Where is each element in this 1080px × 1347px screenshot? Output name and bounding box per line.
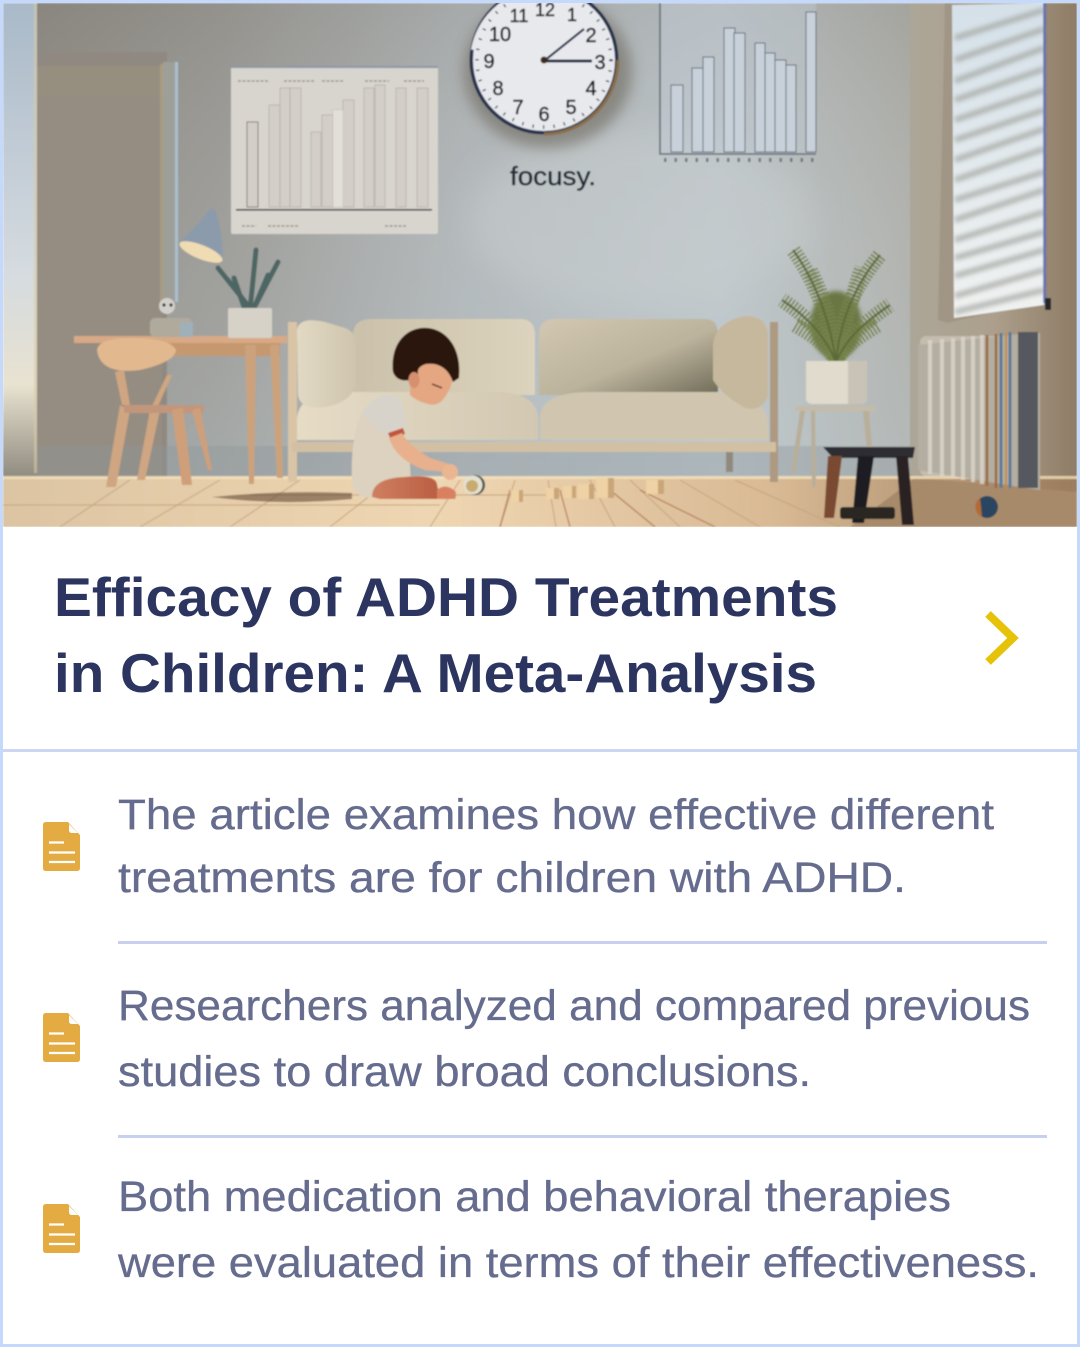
text: first point — [118, 791, 994, 902]
floor — [3, 476, 1077, 527]
wall clock: 10 — [489, 24, 511, 46]
wall clock: 6 — [538, 104, 550, 126]
desk lamp — [178, 208, 224, 264]
skirting — [37, 446, 917, 478]
wall clock — [464, 0, 632, 148]
bullet 1 — [43, 791, 994, 902]
side table — [791, 406, 875, 487]
wall clock: 5 — [565, 97, 577, 119]
window with blinds — [938, 3, 1051, 323]
sofa — [288, 316, 778, 482]
text: first point: The article examines how effective different — [118, 791, 994, 839]
text: second point: studies to draw broad conclusions. — [118, 1048, 811, 1096]
chair — [97, 338, 212, 487]
wall clock: 2 — [585, 25, 597, 47]
left wall chart — [231, 66, 438, 234]
title: Efficacy of ADHD Treatments — [54, 566, 838, 628]
arm — [389, 433, 455, 472]
bullet 2 — [43, 982, 1030, 1096]
text: first point: treatments are for children with ADHD. — [118, 854, 906, 902]
right wall — [910, 3, 1077, 493]
toy blocks — [511, 478, 664, 502]
text: third point — [117, 1173, 1039, 1287]
title: in Children: A Meta-Analysis — [54, 642, 817, 704]
text: second point — [118, 982, 1030, 1096]
radiator — [918, 332, 1040, 490]
head — [410, 360, 453, 405]
back wall — [3, 3, 923, 483]
text: third point: Both medication and behavioral therapies — [118, 1173, 951, 1221]
ball — [975, 496, 998, 518]
icon: document — [43, 1204, 80, 1253]
toy robot — [150, 298, 193, 337]
icon: document — [43, 822, 80, 871]
icon: document — [43, 1013, 80, 1062]
wall clock: 11 — [510, 6, 528, 26]
legs — [372, 476, 456, 499]
bullet 3 — [43, 1173, 1039, 1287]
desk plant — [218, 250, 278, 338]
stool — [823, 447, 915, 525]
text: third point: were evaluated in terms of their effectiveness. — [117, 1239, 1039, 1287]
text: second point: Researchers analyzed and compared previous — [118, 982, 1030, 1030]
illustration: child playing in a living room — [3, 0, 1077, 527]
wall logo: focusy: focusy. — [510, 161, 596, 191]
desk — [74, 336, 287, 484]
wall clock: 8 — [492, 78, 504, 100]
left window strip — [3, 3, 37, 493]
wall clock: 7 — [512, 97, 524, 119]
wall clock: 9 — [483, 51, 495, 73]
wall clock: 4 — [585, 78, 597, 100]
icon: chevron arrow — [988, 614, 1013, 662]
torso — [351, 440, 412, 498]
right wall chart — [660, 3, 816, 160]
floor shadow — [212, 492, 352, 502]
child sitting on the floor — [352, 328, 459, 499]
wall clock: 3 — [594, 52, 606, 74]
side plant — [782, 250, 890, 404]
wall clock: 12 — [535, 0, 555, 20]
toy wheel — [464, 475, 485, 495]
wall clock: 1 — [567, 5, 577, 25]
door — [37, 52, 178, 477]
title — [54, 566, 838, 704]
